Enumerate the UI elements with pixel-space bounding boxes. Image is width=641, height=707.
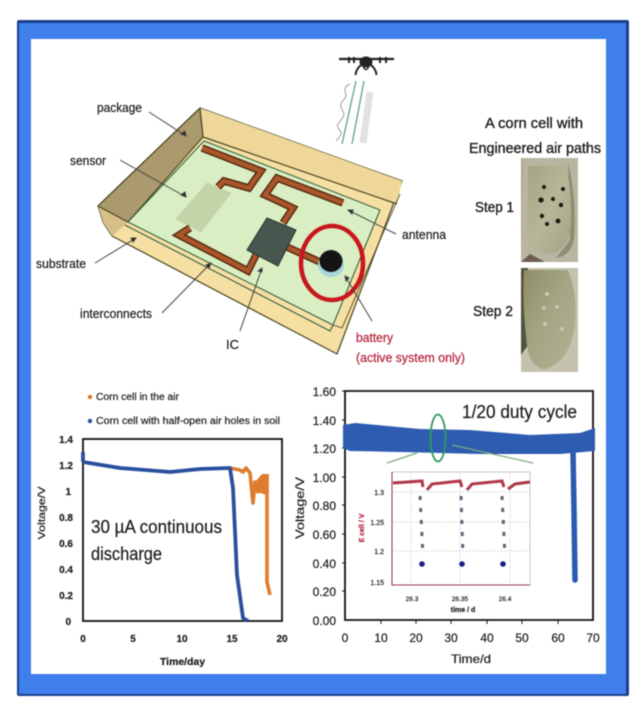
- annotation: 30 uA continuous discharge: 30 µA continuous: [91, 517, 222, 537]
- y axis values: [59, 435, 73, 628]
- green zoom lines: [387, 445, 533, 463]
- x axis values: 50: [515, 631, 529, 645]
- x axis values: 0: [342, 631, 349, 645]
- label: substrate: substrate: [36, 257, 86, 271]
- y axis values: 0.60: [313, 528, 336, 542]
- x axis values: [342, 631, 600, 645]
- y axis title: Voltage/V: [293, 477, 307, 539]
- inset y values: 1.2: [374, 549, 384, 556]
- inset y values: [370, 490, 384, 587]
- photo: step 1: [521, 158, 578, 262]
- inset chart: [359, 472, 530, 614]
- y axis values: 1.2: [59, 461, 73, 472]
- annotation: 1/20 duty cycle: 1/20 duty cycle: [462, 402, 577, 422]
- x axis values: 30: [444, 631, 458, 645]
- x axis values: 70: [586, 631, 600, 645]
- annotation: 30 uA continuous discharge: [91, 517, 222, 564]
- inset red trace: [393, 481, 530, 490]
- x axis values: 5: [130, 634, 136, 645]
- y axis values: 1.60: [313, 385, 336, 399]
- plot area: [83, 439, 282, 621]
- inset y values: 1.25: [370, 520, 384, 527]
- blue voltage band: [343, 423, 595, 454]
- plot axes: [345, 391, 593, 620]
- green zoom ellipse: [430, 414, 446, 462]
- y axis values: 1.20: [313, 442, 336, 456]
- diagram: corn cell package: [36, 101, 465, 365]
- y axis values: 0.80: [313, 499, 336, 513]
- voltage drop: [573, 450, 575, 580]
- inset x values: 26.3: [406, 596, 419, 603]
- x axis title: Time/day: [160, 656, 205, 668]
- x axis values: 20: [409, 631, 423, 645]
- inset x values: 26.4: [499, 596, 512, 603]
- y axis values: 0.8: [59, 513, 73, 524]
- corn cell subheading: Engineered air paths: [469, 140, 601, 157]
- inset y values: 1.15: [370, 580, 384, 587]
- annotation: 30 uA continuous discharge: discharge: [91, 544, 162, 564]
- package: [98, 108, 402, 354]
- x axis values: 10: [176, 634, 188, 645]
- y axis values: 0.40: [313, 557, 336, 571]
- y axis values: 0.2: [59, 591, 73, 602]
- x axis values: 10: [374, 631, 388, 645]
- inset end points: [419, 561, 506, 567]
- y axis values: 1.4: [59, 435, 73, 446]
- corn cell heading: A corn cell with: [485, 115, 583, 132]
- x axis values: [80, 634, 288, 645]
- y axis values: 1.00: [313, 471, 336, 485]
- right chart: duty cycle: [293, 385, 600, 666]
- y axis values: 0.00: [313, 614, 336, 628]
- inset y title: E cell / V: [359, 513, 366, 542]
- y axis values: 0.6: [59, 539, 73, 550]
- substrate: [125, 141, 380, 331]
- x axis values: 20: [276, 634, 288, 645]
- photo: step 2: [521, 268, 578, 372]
- IC chip: [247, 218, 296, 266]
- label: antenna: antenna: [402, 228, 446, 242]
- leader lines: [95, 112, 396, 331]
- chart legend: [88, 392, 280, 427]
- y axis title: Voltage/V: [37, 486, 48, 540]
- signal lines: [336, 81, 370, 144]
- x axis title: Time/d: [451, 652, 491, 666]
- x axis values: 15: [226, 634, 238, 645]
- label: IC: IC: [226, 337, 239, 352]
- axis ticks: [342, 391, 558, 624]
- label: sensor: sensor: [70, 154, 106, 168]
- label: interconnects: interconnects: [80, 307, 152, 321]
- inset x values: 26.35: [452, 596, 469, 603]
- y axis values: 0.20: [313, 585, 336, 599]
- battery: [318, 250, 344, 277]
- x axis values: 0: [80, 634, 86, 645]
- inset discharge dots: [420, 496, 505, 556]
- corn cell panel: [469, 115, 601, 372]
- label: step 1: Step 1: [475, 199, 514, 216]
- inset x title: time / d: [451, 607, 475, 614]
- y axis values: 1: [65, 487, 71, 498]
- inset y values: 1.3: [374, 490, 384, 497]
- sensor: [176, 183, 231, 232]
- label: battery: battery: [356, 331, 394, 345]
- chart legend: Corn cell with half-open air holes in soil: [96, 416, 280, 427]
- left chart: continuous discharge: [37, 392, 288, 668]
- drone with signal waves: [336, 57, 394, 144]
- y axis values: [313, 385, 336, 628]
- label: package: package: [97, 101, 142, 115]
- label: step 2: Step 2: [473, 303, 513, 320]
- blue series: [83, 452, 248, 621]
- label: active system only: (active system only): [356, 351, 465, 365]
- x axis values: 40: [480, 631, 494, 645]
- icon: drone: [339, 57, 394, 75]
- orange series: [230, 468, 270, 595]
- y axis values: 0.4: [59, 565, 73, 576]
- inset x values: [406, 596, 512, 603]
- y axis values: 1.40: [313, 414, 336, 428]
- chart legend: Corn cell in the air: [96, 392, 180, 403]
- red highlight circle: [301, 226, 363, 300]
- antenna and interconnects: [179, 148, 343, 271]
- x axis values: 60: [551, 631, 565, 645]
- y axis values: 0: [65, 617, 71, 628]
